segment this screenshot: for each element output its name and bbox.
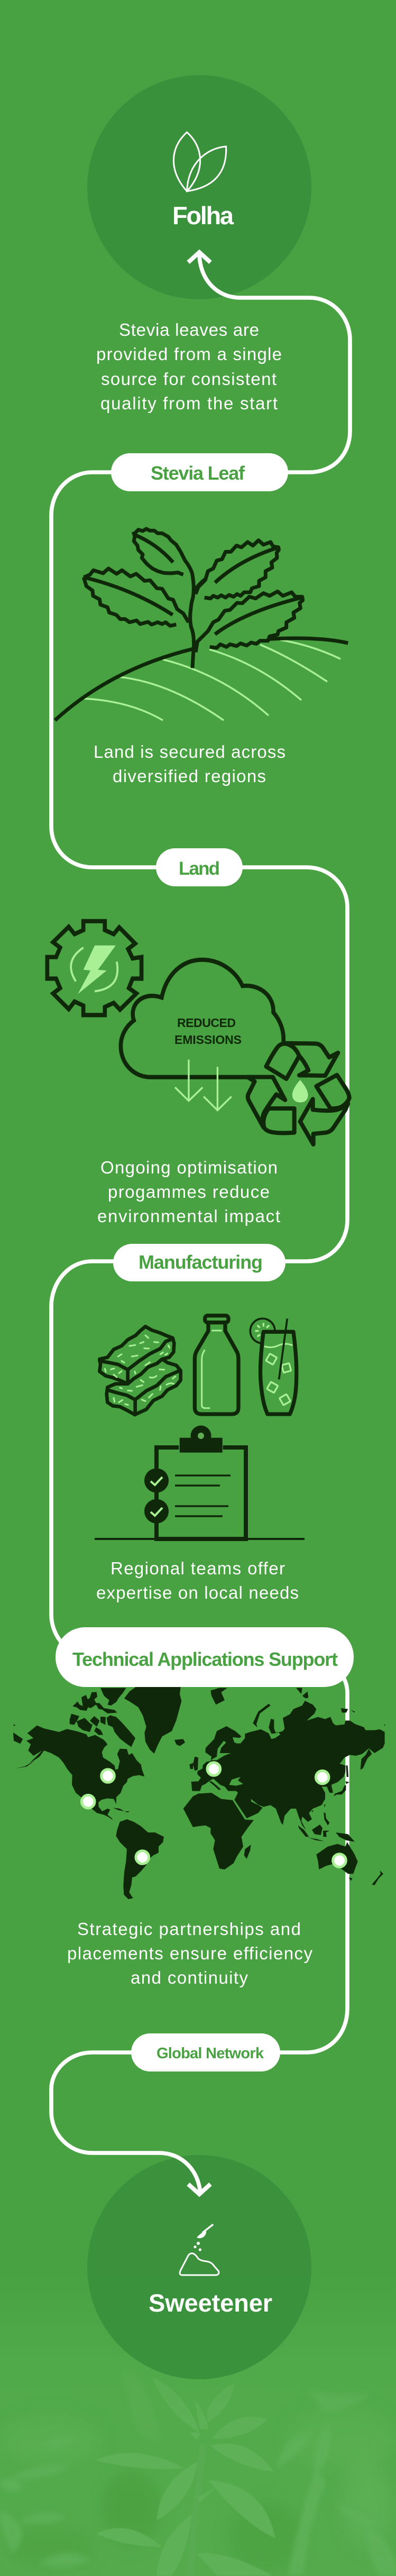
pill: Manufacturing [113,1244,286,1281]
icon: stevia plant on hill [55,529,348,720]
circle: Folha [87,75,311,299]
text: regional teams: expertise on local needs [96,1583,299,1602]
left leaves and stem [84,529,205,668]
text: optimisation: progammes reduce [108,1182,270,1202]
pill: Land [156,848,243,886]
hill ridge [55,649,193,720]
text: regional teams [96,1559,299,1602]
connector path [51,253,350,2195]
pill: Land: Land [179,858,220,879]
pill: Technical Applications Support: Technical Applications Support [72,1648,338,1670]
text: optimisation [97,1158,280,1226]
pill: Technical Applications Support [56,1627,354,1687]
text: optimisation: Ongoing optimisation [100,1158,278,1177]
circle: Sweetener [87,2155,311,2379]
text: land: Land is secured across [94,742,286,762]
text: stevia leaves: source for consistent [101,369,277,389]
label: reduced emissions [174,1016,242,1047]
heading: Sweetener: Sweetener [149,2289,272,2317]
text: strategic partnerships: Strategic partnerships and [77,1919,301,1939]
label: reduced emissions: EMISSIONS [174,1033,242,1047]
icon: leaves [173,132,226,191]
icon: recycle with drop [247,1043,349,1144]
icon: iced drink [250,1318,297,1414]
pill: Stevia Leaf [111,453,288,491]
text: regional teams: Regional teams offer [110,1559,285,1578]
photo: blurred stevia plants [0,2366,396,2576]
text: stevia leaves [96,320,282,413]
right leaves [196,540,348,652]
icon: reduced emissions cloud [121,960,283,1110]
americas [13,1687,198,1885]
text: land: diversified regions [113,766,266,786]
text: optimisation: environmental impact [97,1206,280,1226]
text: strategic partnerships: and continuity [131,1968,248,1987]
text: land [94,742,286,786]
arrow: bottom head [188,2184,210,2194]
map pins [81,1763,346,1867]
pill: Stevia Leaf: Stevia Leaf [151,462,245,484]
text: stevia leaves: quality from the start [100,393,278,413]
world map [13,1687,385,1899]
icon: energy gear [47,921,142,1015]
pill: Global Network [131,2033,280,2071]
south america tip [123,1885,133,1899]
heading: Folha: Folha [172,201,234,230]
eurasia, africa and oceania [183,1688,385,1885]
text: strategic partnerships: placements ensure efficiency [67,1944,313,1963]
label: reduced emissions: REDUCED [177,1016,236,1030]
hill contour lines [84,640,340,720]
icon: clipboard checklist [95,1426,305,1539]
icon: food bars [99,1326,181,1415]
icon: milk bottle [195,1316,238,1414]
text: stevia leaves: Stevia leaves are [119,320,259,340]
text: stevia leaves: provided from a single [96,344,282,364]
icon: spoon and sweetener pile [180,2225,219,2275]
arrow: top head [188,252,210,262]
pill: Global Network: Global Network [156,2045,264,2062]
text: strategic partnerships [67,1919,313,1987]
pill: Manufacturing: Manufacturing [139,1251,263,1273]
